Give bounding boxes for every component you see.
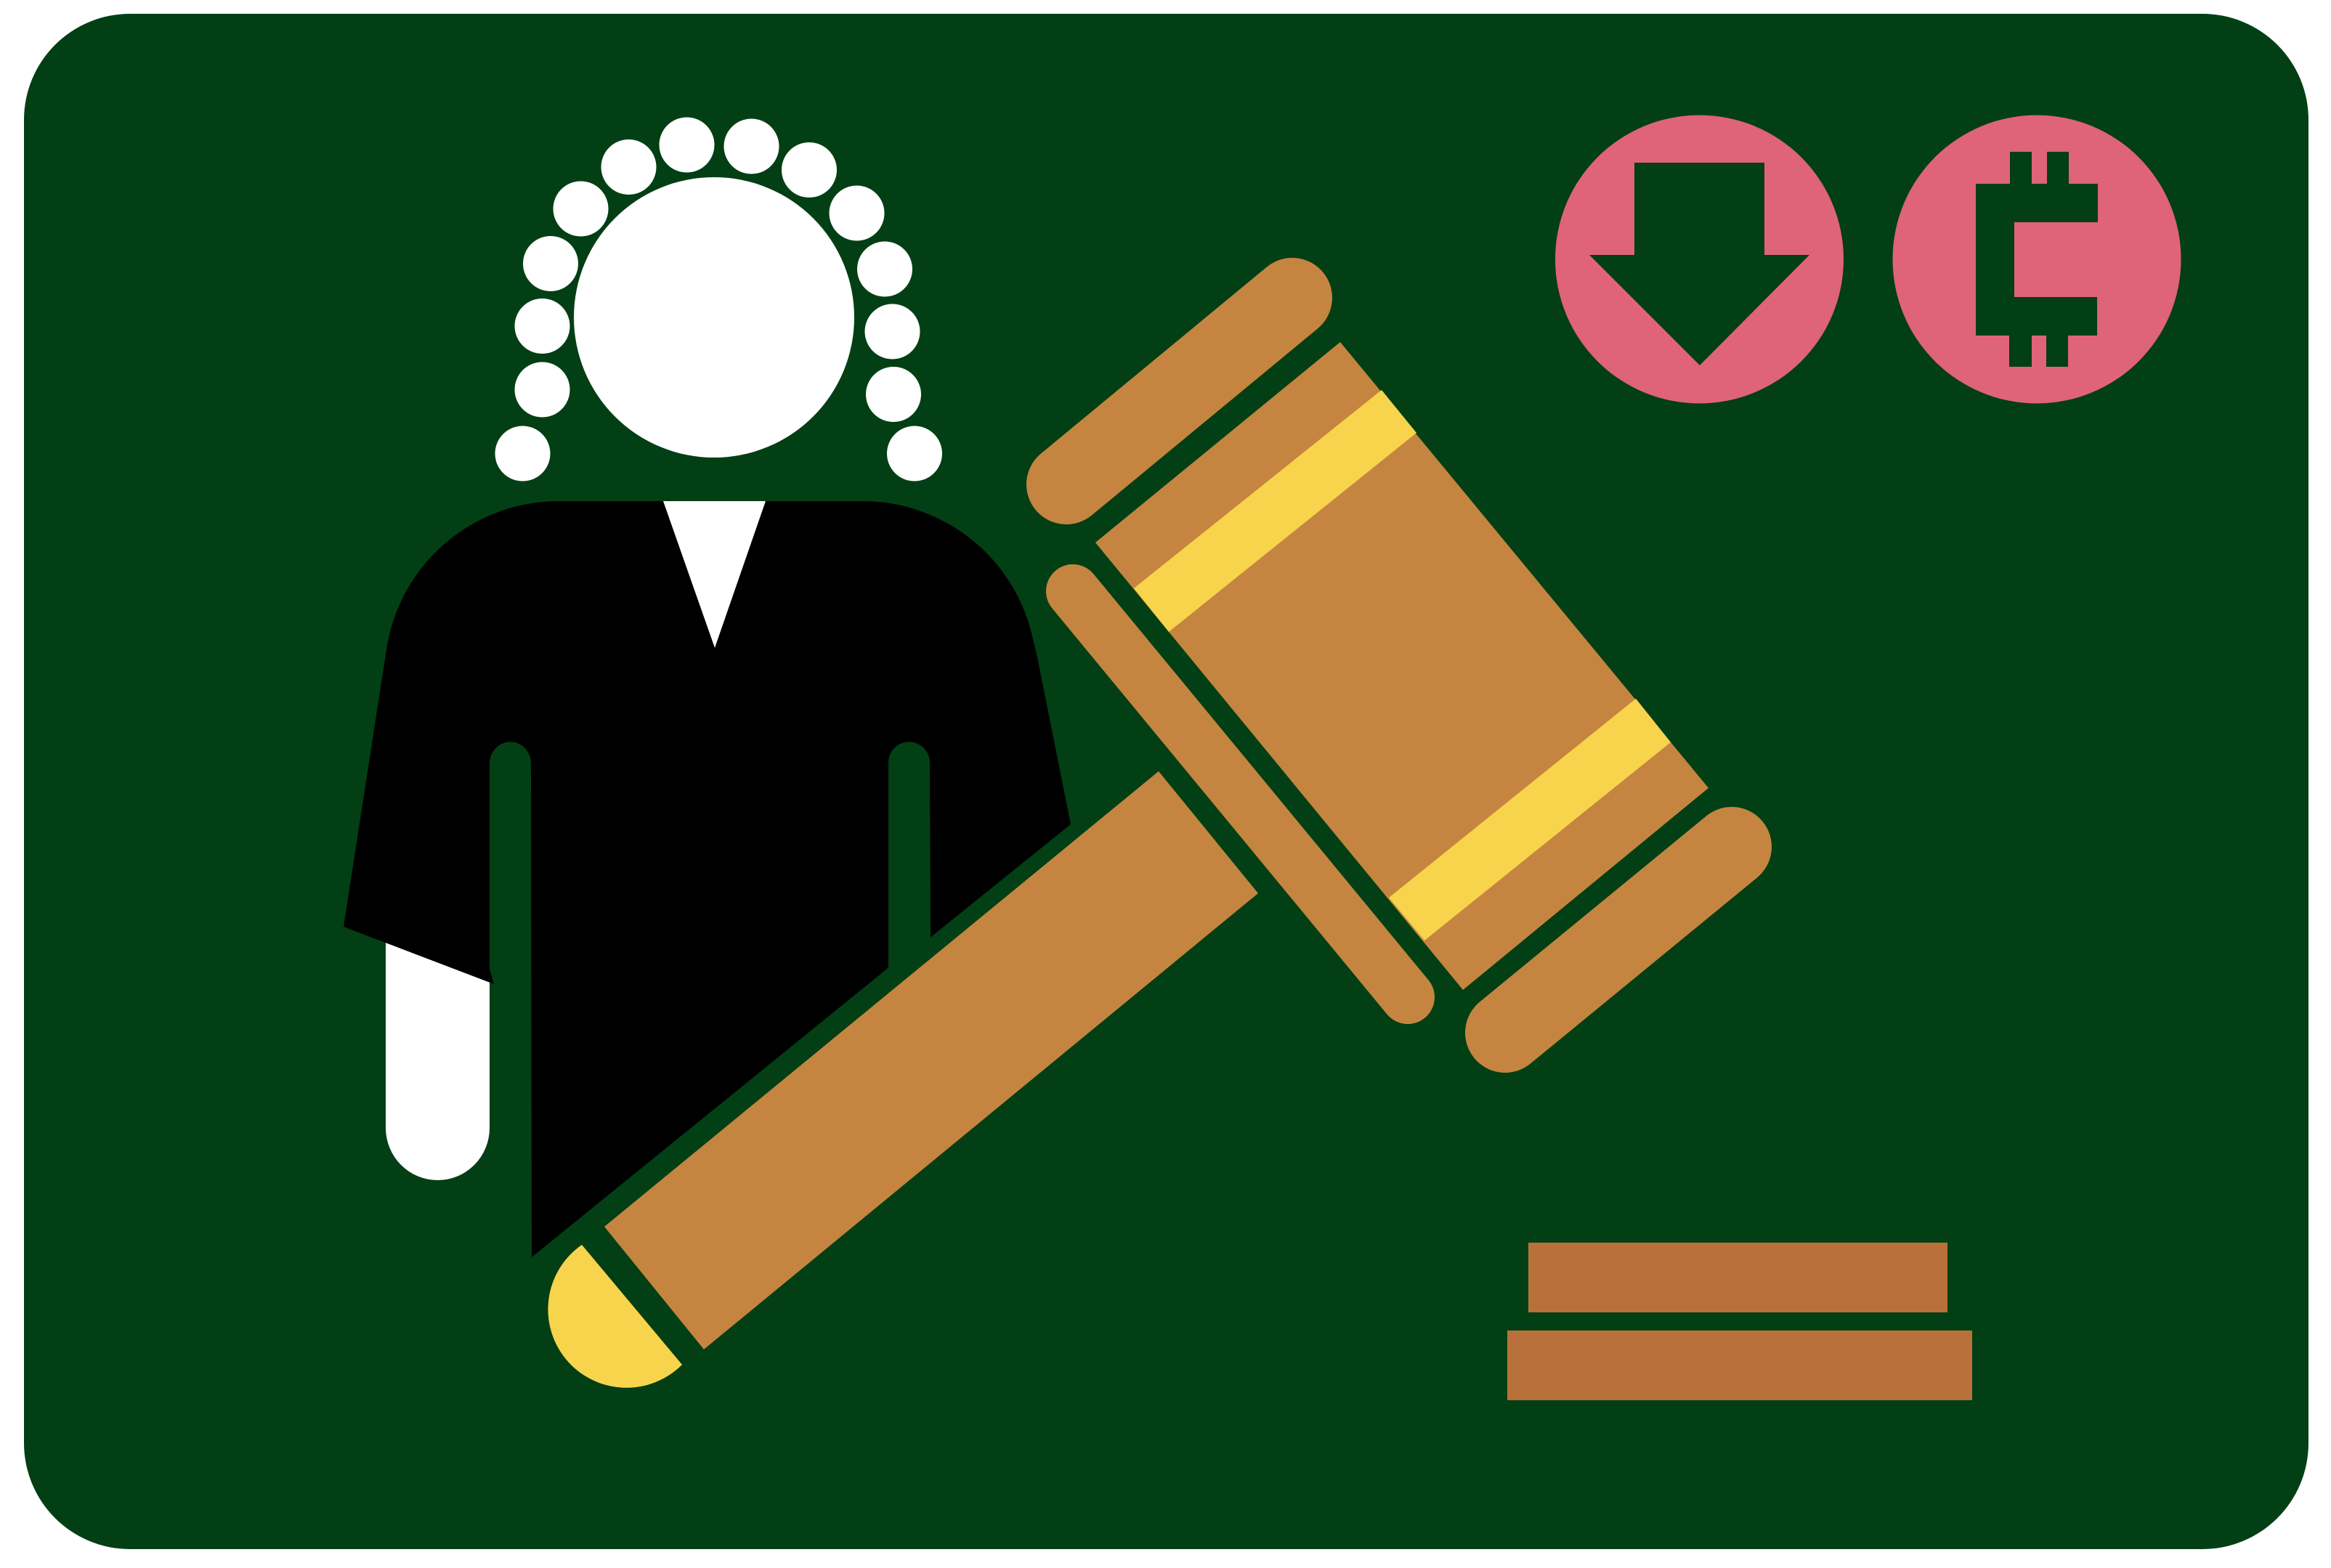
down arrow	[1589, 163, 1809, 365]
gavel head bottom cap	[1505, 847, 1732, 1033]
sound block base	[1507, 1331, 1972, 1400]
pink circle	[1893, 115, 2181, 404]
icon: judge figure	[344, 118, 1071, 1257]
gavel head upper yellow stripe	[1134, 390, 1416, 632]
judge arm	[386, 933, 490, 1180]
judge head	[574, 177, 854, 458]
icon: down arrow in pink circle	[1555, 115, 1844, 404]
judge wig curls	[495, 118, 942, 481]
pink circle	[1555, 115, 1844, 404]
judge black robe	[344, 501, 1071, 1257]
gavel head top cap	[1066, 298, 1292, 484]
sound block top	[1528, 1243, 1947, 1312]
judge white collar	[663, 501, 766, 648]
gavel handle	[604, 771, 1258, 1349]
icon: gavel sound block	[1507, 1243, 1972, 1400]
gavel handle yellow end	[548, 1245, 682, 1388]
bitcoin symbol	[1976, 152, 2098, 367]
icon: bitcoin symbol in pink circle	[1893, 115, 2181, 404]
gavel head side bar	[1073, 591, 1408, 997]
icon: gavel	[548, 298, 1732, 1388]
gavel head lower yellow stripe	[1389, 699, 1671, 941]
gavel head	[1095, 342, 1708, 990]
